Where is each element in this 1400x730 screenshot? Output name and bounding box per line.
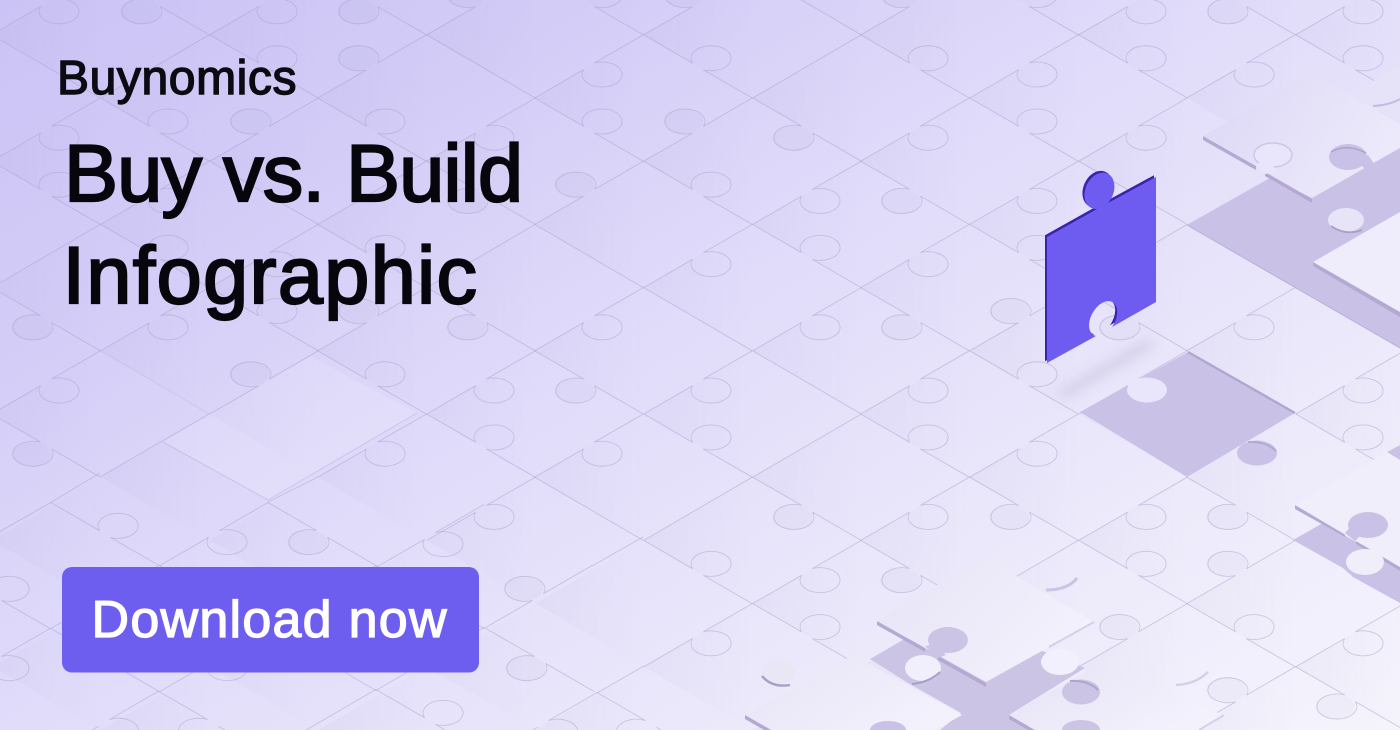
ghost lifted puzzle piece, left — [163, 356, 417, 500]
dark hole: lower right slots — [870, 627, 1101, 730]
logo: Buynomics: Buynomics — [57, 52, 296, 105]
lifted piece: bottom centre — [877, 557, 1094, 687]
lifted piece: bottom left — [745, 655, 962, 730]
button: Download now: Download now — [92, 591, 447, 649]
icon: standing blue puzzle piece — [1045, 171, 1156, 363]
title — [62, 129, 523, 321]
lifted piece: right edge — [1313, 208, 1400, 317]
dark hole: empty slot under blue piece — [1080, 352, 1295, 477]
dark hole: top right empty slots — [1187, 148, 1400, 348]
button: Download now — [62, 567, 479, 672]
soft shadow of blue piece — [1060, 342, 1152, 396]
title line 1: Buy vs. Build — [64, 129, 523, 219]
dark hole and lifted piece: right edge lower — [1293, 445, 1400, 603]
lifted piece: top right — [1203, 73, 1400, 203]
title line 2: Infographic — [62, 231, 477, 321]
lifted piece: top right corner — [1353, 65, 1400, 122]
lifted piece: bottom right — [1009, 667, 1224, 730]
